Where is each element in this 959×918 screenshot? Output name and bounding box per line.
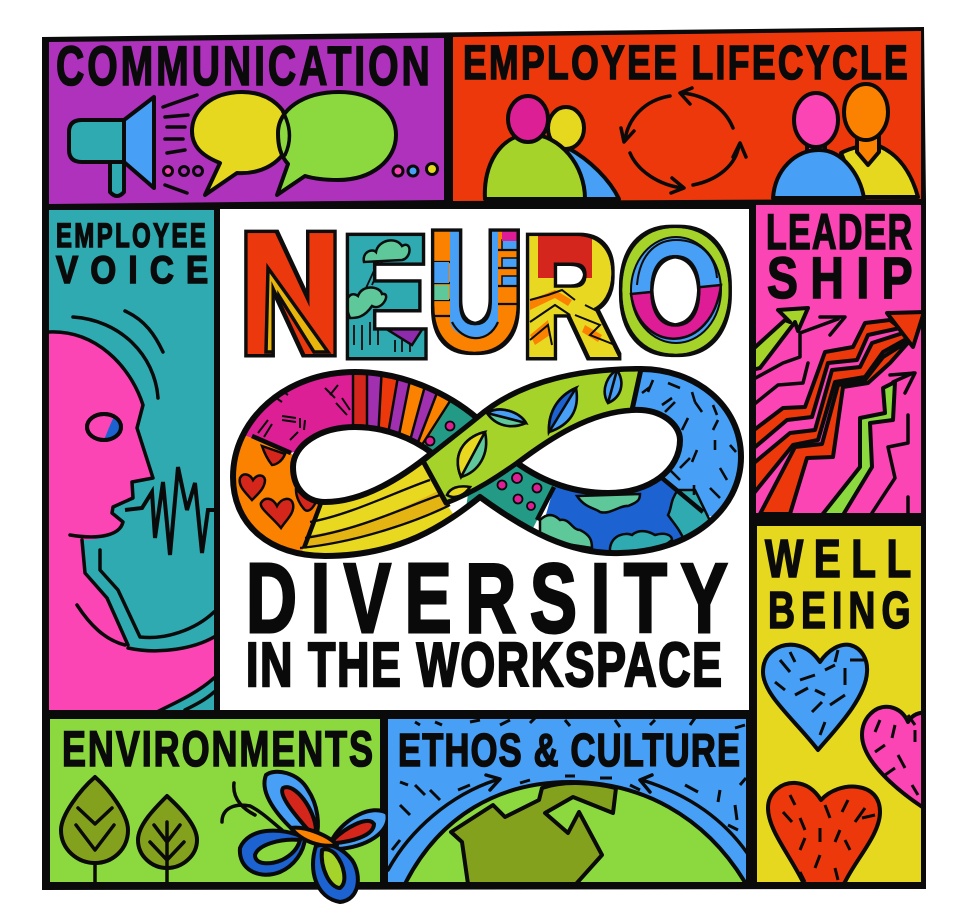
panel: communication <box>49 35 444 204</box>
heading: ethos and culture: ETHOS & CULTURE <box>398 724 740 776</box>
heading: employee voice: VOICE <box>56 247 208 292</box>
icon: speaking head <box>49 311 216 712</box>
heading: leadership <box>766 205 913 311</box>
heading: communication: COMMUNICATION <box>56 35 430 98</box>
chart: rising arrows <box>752 308 924 515</box>
panel: ethos and culture <box>388 718 750 884</box>
title: neuro: N <box>242 202 339 385</box>
icon: speech bubble yellow <box>192 92 290 195</box>
icon: two people left <box>485 96 619 199</box>
title: neuro: U <box>430 201 521 380</box>
heading: environments: ENVIRONMENTS <box>62 722 373 777</box>
icon: infinity symbol <box>230 366 744 559</box>
heading: leadership: SHIP <box>767 246 913 311</box>
icon: leaf tree one <box>61 777 128 882</box>
icon: hearts <box>763 645 930 884</box>
icon: leaves <box>447 370 621 497</box>
panel: leadership <box>752 205 924 515</box>
icon: dots right <box>393 164 438 176</box>
title: neuro: E <box>344 205 426 388</box>
title: neuro <box>242 199 731 388</box>
title: neuro: O <box>620 199 731 384</box>
panel: well being <box>757 526 930 884</box>
icon: leaf tree two <box>138 796 197 882</box>
icon: megaphone <box>69 95 197 196</box>
heading: employee voice <box>56 217 208 292</box>
panel: center title <box>215 199 770 710</box>
icon: globe <box>388 718 750 884</box>
infinity outlines <box>233 369 741 556</box>
heading: well being: WELL <box>765 529 911 589</box>
bubble overlap line <box>283 112 289 155</box>
icon: speech bubble green <box>277 92 396 195</box>
panel: employee voice <box>49 210 216 712</box>
subtitle: in the workspace: IN THE WORKSPACE <box>246 631 722 700</box>
title: neuro: R <box>524 205 615 388</box>
icon: dots left <box>164 166 202 176</box>
heading: well being <box>765 529 911 639</box>
panel: employee lifecycle <box>453 31 921 201</box>
title: diversity: DIVERSITY <box>246 545 728 654</box>
heading: well being: BEING <box>768 581 911 639</box>
panel: environments <box>50 719 388 902</box>
icon: butterfly <box>222 772 388 902</box>
heading: employee voice: EMPLOYEE <box>56 217 206 255</box>
heading: employee lifecycle: EMPLOYEE LIFECYCLE <box>463 36 908 89</box>
infinity green band <box>423 369 641 503</box>
heading: leadership: LEADER <box>766 205 912 261</box>
icon: two people right <box>773 84 918 198</box>
icon: cycle arrows <box>621 88 746 193</box>
